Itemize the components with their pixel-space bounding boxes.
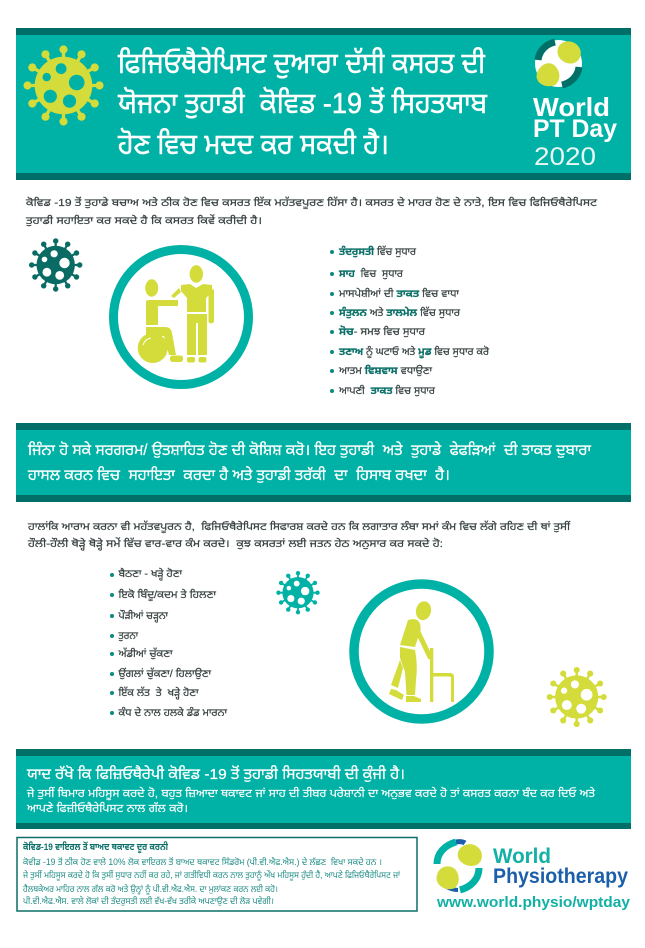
- intro text: ਕੋਵਿਡ -19 ਤੋਂ ਤੁਹਾਡੇ ਬਚਾਅ ਅਤੇ ਠੀਕ ਹੋਣ ਵਿਚ ਕਸਰਤ ਇੱਕ ਮਹੱਤਵਪੂਰਣ ਹਿੱਸਾ ਹੈ। ਕਸਰਤ ਦੇ ਮਾਹਰ ਹੋਣ ਦੇ ਨਾਤੇ, ਇਸ ਵਿਚ ਫਿਜਿਓਥੈਰੇਪਿਸਟ: [25, 195, 598, 209]
- title text: ਹੋਣ ਵਿਚ ਮਦਦ ਕਰ ਸਕਦੀ ਹੈ।: [117, 127, 389, 161]
- icon: teal virus: [276, 571, 320, 614]
- logo: World Physiotherapy: World: [493, 845, 551, 868]
- box: post-viral fatigue note: ਹੈਲਥਕੇਅਰ ਮਾਹਿਰ ਨਾਲ ਗੱਲ ਕਰੋ ਅਤੇ ਉਨ੍ਹਾਂ ਨੂੰ ਪੀ.ਵੀ.ਐਫ.ਐਸ. ਦਾ ਮੁਲਾਂਕਣ ਕਰਨ ਲਈ ਕਹੋ।: [22, 882, 278, 896]
- list: exercises: ਬੈਠਣਾ - ਖੜ੍ਹੇ ਹੋਣਾ: [117, 566, 183, 581]
- list: exercises: ਤੁਰਨਾ: [118, 630, 138, 642]
- list: benefits: ਸੰਤੁਲਨ ਅਤੇ ਤਾਲਮੇਲ ਵਿੱਚ ਸੁਧਾਰ: [338, 305, 461, 319]
- paragraph: pacing advice: [27, 519, 570, 551]
- icon: dark green virus: [29, 238, 82, 292]
- list: exercises: [110, 566, 228, 719]
- logo: World PT Day 2020: World: [533, 92, 610, 122]
- paragraph: pacing advice: ਹੌਲੀ-ਹੌਲੀ ਥੋੜ੍ਹੇ ਥੋੜ੍ਹੇ ਸਮੇਂ ਵਿੱਚ ਵਾਰ-ਵਾਰ ਕੰਮ ਕਰਦੇ। ਕੁਝ ਕਸਰਤਾਂ ਲਈ ਜਤਨ ਹੇਠ ਅਨੁਸਾਰ ਕਰ ਸਕਦੇ ਹੋ:: [27, 536, 443, 551]
- box: post-viral fatigue note: ਪੀ.ਵੀ.ਐਫ.ਐਸ. ਵਾਲੇ ਲੋਕਾਂ ਦੀ ਤੰਦਰੁਸਤੀ ਲਈ ਵੱਖ-ਵੱਖ ਤਰੀਕੇ ਅਪਣਾਉਣ ਦੀ ਲੋੜ ਪਵੇਗੀ।: [22, 894, 274, 906]
- list: exercises: ਅੱਡੀਆਂ ਚੁੱਕਣਾ: [117, 646, 173, 660]
- title text: ਫਿਜਿਓਥੈਰੇਪਿਸਟ ਦੁਆਰਾ ਦੱਸੀ ਕਸਰਤ ਦੀ: [117, 47, 485, 80]
- list: benefits: ਆਤਮ ਵਿਸ਼ਵਾਸ ਵਧਾਉਣਾ: [338, 363, 433, 377]
- title text: ਯੋਜਨਾ ਤੁਹਾਡੀ ਕੋਵਿਡ -19 ਤੋਂ ਸਿਹਤਯਾਬ: [117, 86, 487, 120]
- list: benefits: ਤਣਾਅ ਨੂੰ ਘਟਾਓ ਅਤੇ ਮੂਡ ਵਿਚ ਸੁਧਾਰ ਕਰੋ: [338, 344, 490, 360]
- list: exercises: ਪੌੜੀਆਂ ਚੜ੍ਹਨਾ: [118, 609, 169, 623]
- list: benefits: [330, 244, 490, 397]
- logo: World PT Day 2020: [533, 40, 617, 171]
- logo: World Physiotherapy: [434, 842, 631, 911]
- icon: yellow virus: [23, 45, 104, 126]
- paragraph: pacing advice: ਹਾਲਾਂਕਿ ਆਰਾਮ ਕਰਨਾ ਵੀ ਮਹੱਤਵਪੂਰਨ ਹੈ, ਫਿਜਿਓਥੈਰੇਪਿਸਟ ਸਿਫਾਰਸ਼ ਕਰਦੇ ਹਨ ਕਿ ਲਗਾਤਾਰ ਲੰਬਾ ਸਮਾਂ ਕੰਮ ਵਿਚ ਲੱਗੇ ਰਹਿਣ ਦੀ ਥਾਂ ਤੁਸੀਂ: [27, 519, 570, 533]
- intro text: [25, 195, 598, 227]
- list: benefits: ਸਾਹ ਵਿਚ ਸੁਧਾਰ: [338, 267, 404, 280]
- logo: World PT Day 2020: PT Day: [533, 115, 617, 143]
- box: post-viral fatigue note: ਕੋਵੀਡ -19 ਤੋਂ ਠੀਕ ਹੋਣ ਵਾਲੇ 10% ਲੋਕ ਵਾਇਰਲ ਤੋਂ ਬਾਅਦ ਥਕਾਵਟ ਸਿੰਡਰੋਮ (ਪੀ.ਵੀ.ਐਫ.ਐਸ.) ਦੇ ਲੱਛਣ ਵਿਖਾ ਸਕਦੇ ਹਨ ।: [22, 855, 382, 867]
- logo: World Physiotherapy: www.world.physio/wptday: [436, 894, 631, 911]
- box: post-viral fatigue note: ਜੇ ਤੁਸੀਂ ਮਹਿਸੂਸ ਕਰਦੇ ਹੋ ਕਿ ਤੁਸੀਂ ਸੁਧਾਰ ਨਹੀਂ ਕਰ ਰਹੇ, ਜਾਂ ਗਤੀਵਿਧੀ ਕਰਨ ਨਾਲ ਤੁਹਾਨੂੰ ਔਖ ਮਹਿਸੂਸ ਹੁੰਦੀ ਹੈ, ਆਪਣੇ ਫਿਜਿਓਥੈਰੇਪਿਸਟ ਜਾਂ: [22, 868, 401, 881]
- list: exercises: ਕੰਧ ਦੇ ਨਾਲ ਹਲਕੇ ਡੰਡ ਮਾਰਨਾ: [117, 706, 228, 719]
- icon: yellow virus lower right: [547, 667, 607, 727]
- banner: reminder: ਯਾਦ ਰੱਖੋ ਕਿ ਫਿਜ਼ਿਓਥੈਰੇਪੀ ਕੋਵਿਡ -19 ਤੋਂ ਤੁਹਾਡੀ ਸਿਹਤਯਾਬੀ ਦੀ ਕੁੰਜੀ ਹੈ।: [26, 765, 405, 783]
- list: benefits: ਸੋਚ- ਸਮਝ ਵਿਚ ਸੁਧਾਰ: [338, 325, 426, 338]
- banner: stay active: ਜਿੰਨਾ ਹੋ ਸਕੇ ਸਰਗਰਮ/ ਉਤਸ਼ਾਹਿਤ ਹੋਣ ਦੀ ਕੋਸ਼ਿਸ਼ ਕਰੋ। ਇਹ ਤੁਹਾਡੀ ਅਤੇ ਤੁਹਾਡੇ ਫੇਫੜਿਆਂ ਦੀ ਤਾਕਤ ਦੁਬਾਰਾ: [27, 440, 591, 459]
- banner: title: [16, 28, 631, 180]
- logo: World Physiotherapy: Physiotherapy: [493, 865, 628, 888]
- banner: stay active: ਹਾਸਲ ਕਰਨ ਵਿਚ ਸਹਾਇਤਾ ਕਰਦਾ ਹੈ ਅਤੇ ਤੁਹਾਡੀ ਤਰੱਕੀ ਦਾ ਹਿਸਾਬ ਰਖਦਾ ਹੈ।: [27, 465, 450, 484]
- banner: reminder: ਆਪਣੇ ਫਿਜ਼ੀਓਥੈਰੇਪਿਸਟ ਨਾਲ ਗੱਲ ਕਰੋ।: [26, 801, 188, 815]
- title text: [117, 47, 487, 161]
- list: exercises: ਇੱਕ ਲੱਤ ਤੇ ਖੜ੍ਹੇ ਹੋਣਾ: [117, 685, 199, 700]
- icon: physiotherapist with patient in ring: [114, 250, 248, 384]
- list: benefits: ਮਾਸਪੇਸ਼ੀਆਂ ਦੀ ਤਾਕਤ ਵਿਚ ਵਾਧਾ: [338, 287, 460, 300]
- box: post-viral fatigue note: ਕੋਵਿਡ-19 ਵਾਇਰਲ ਤੋਂ ਬਾਅਦ ਥਕਾਵਟ ਦੂਰ ਕਰਨੀ: [22, 841, 168, 853]
- list: exercises: ਉਂਗਲਾਂ ਚੁੱਕਣਾ/ ਹਿਲਾਉਣਾ: [117, 666, 212, 680]
- box: post-viral fatigue note: [17, 838, 417, 911]
- intro text: ਤੁਹਾਡੀ ਸਹਾਇਤਾ ਕਰ ਸਕਦੇ ਹੈ ਕਿ ਕਸਰਤ ਕਿਵੇਂ ਕਰੀਦੀ ਹੈ।: [25, 214, 262, 227]
- logo: World PT Day 2020: 2020: [534, 143, 596, 171]
- banner: reminder: ਜੇ ਤੁਸੀਂ ਬਿਮਾਰ ਮਹਿਸੂਸ ਕਰਦੇ ਹੋ, ਬਹੁਤ ਜ਼ਿਆਦਾ ਥਕਾਵਟ ਜਾਂ ਸਾਹ ਦੀ ਤੀਬਰ ਪਰੇਸ਼ਾਨੀ ਦਾ ਅਨੁਭਵ ਕਰਦੇ ਹੋ ਤਾਂ ਕਸਰਤ ਕਰਨਾ ਬੰਦ ਕਰ ਦਿਓ ਅਤੇ: [26, 786, 596, 800]
- list: benefits: ਤੰਦਰੁਸਤੀ ਵਿੱਚ ਸੁਧਾਰ: [338, 244, 417, 258]
- list: exercises: ਇਕੋ ਬਿੰਦੂ/ਕਦਮ ਤੇ ਹਿਲਣਾ: [117, 587, 217, 601]
- banner: reminder: [16, 749, 631, 829]
- banner: stay active: [16, 423, 631, 502]
- icon: person with walking frame in ring: [354, 584, 489, 719]
- list: benefits: ਆਪਣੀ ਤਾਕਤ ਵਿਚ ਸੁਧਾਰ: [338, 384, 436, 397]
